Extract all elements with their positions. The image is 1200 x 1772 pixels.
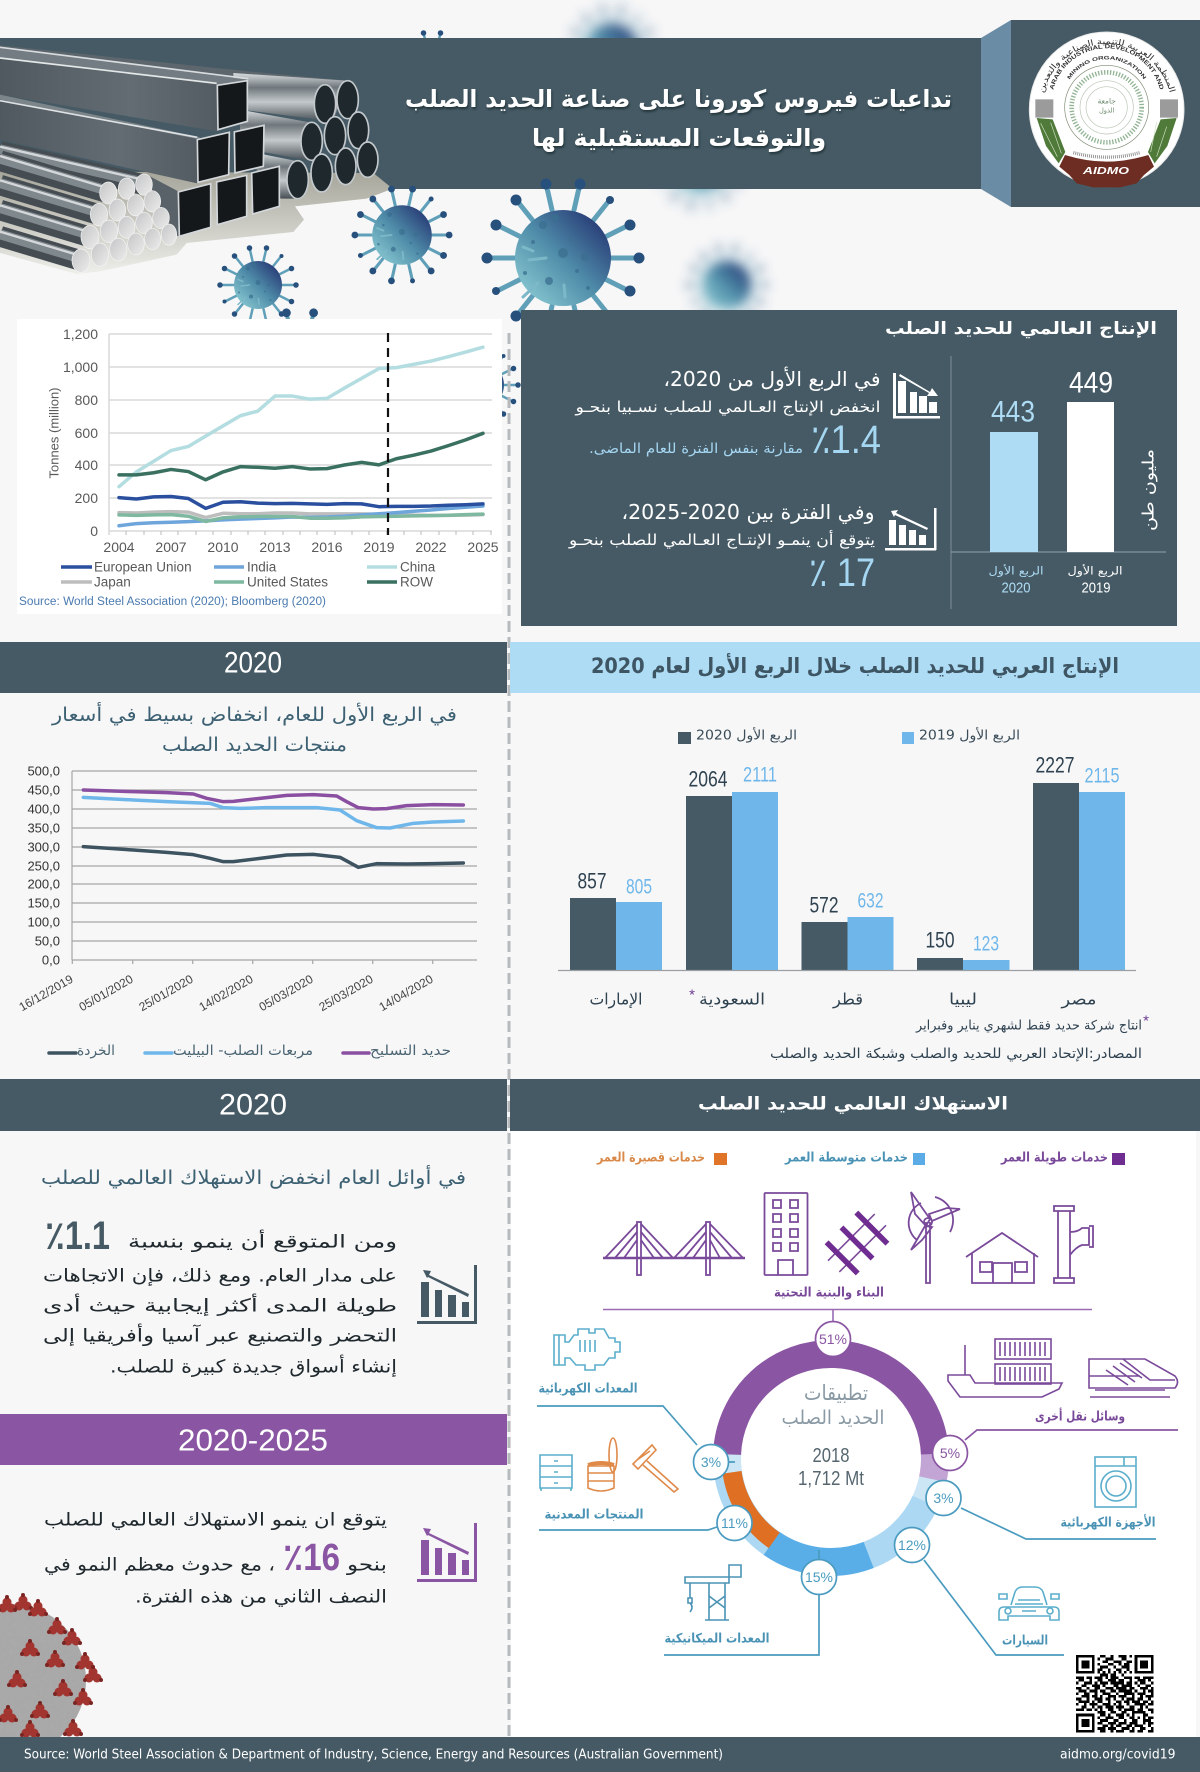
- panel: world production forecast chart: United States: [247, 574, 328, 590]
- bar chart: Q1 production: 449: [1069, 366, 1113, 400]
- panel: world production forecast chart: Tonnes (million): [46, 387, 62, 479]
- line chart: steel product prices: 350,0: [27, 820, 60, 836]
- bar chart: Arab production by country: السعودية: [699, 990, 765, 1010]
- panel: world production forecast chart: India: [247, 560, 277, 574]
- illustration: steel pipes: [0, 45, 393, 274]
- vertical dashed divider: [508, 333, 510, 1737]
- bar chart: Arab production by country: ليبيا: [949, 990, 977, 1008]
- legend: service life: [596, 1150, 1125, 1166]
- leader lines: [537, 1406, 1178, 1655]
- line chart: steel product prices: 200,0: [27, 876, 60, 892]
- round bars: [0, 147, 144, 261]
- text block: 2020 consumption: طويلة المدى أكثر إيجابية حيث أدى: [43, 1294, 397, 1316]
- icon: barrel: [588, 1438, 617, 1491]
- text block: 2020-2025 consumption: يتوقع ان ينمو الاستهلاك العالمي للصلب: [44, 1510, 387, 1530]
- panel: world production forecast chart: 0: [90, 523, 98, 539]
- line chart: steel product prices: 50,0: [35, 934, 60, 948]
- text block: 2020-2025 consumption: [44, 1510, 387, 1608]
- notes and sources: [770, 1012, 1149, 1062]
- bar chart: Q1 production: مليون طن: [1138, 449, 1158, 531]
- panel: world production forecast chart: 2022: [415, 539, 447, 555]
- category labels: المعدات الميكانيكية: [664, 1632, 770, 1646]
- heading: Q1 prices: منتجات الحديد الصلب: [162, 734, 347, 756]
- line chart: steel product prices: 25/01/2020: [136, 972, 196, 1014]
- line chart: steel product prices: 300,0: [27, 840, 60, 854]
- panel: world production forecast chart: 2010: [207, 539, 239, 555]
- label: construction: [603, 1286, 1092, 1322]
- panel: world production forecast chart: 2019: [363, 539, 395, 555]
- label: construction: البناء والبنية التحتية: [774, 1286, 884, 1300]
- QR code: [1076, 1655, 1153, 1732]
- icon: washing machine: [1095, 1457, 1136, 1507]
- chart legend: [678, 726, 1020, 744]
- bar chart: Q1 production: 443: [991, 396, 1035, 428]
- text block: Q1 2020 decline: [574, 367, 881, 462]
- title: [405, 85, 952, 152]
- bar chart: Arab production by country: قطر: [832, 990, 863, 1010]
- chart legend: الربع الأول 2020: [696, 726, 797, 744]
- panel: world production forecast chart: 600: [75, 425, 98, 441]
- footer: [0, 1737, 1200, 1772]
- line chart: steel product prices: 05/01/2020: [76, 972, 136, 1014]
- text block: Q1 2020 decline: في الربع الأول من 2020،: [664, 367, 880, 392]
- panel: world production forecast chart: Japan: [94, 574, 131, 590]
- heading: الإنتاج العالمي للحديد الصلب: [885, 319, 1157, 339]
- category labels: وسائل نقل أخرى: [1035, 1408, 1125, 1424]
- notes and sources: المصادر:الإتحاد العربي للحديد والصلب وشبكة الحديد والصلب: [770, 1046, 1142, 1062]
- panel: world production forecast chart: 2013: [259, 539, 291, 555]
- bar chart: Arab production by country: 2111: [743, 764, 777, 786]
- logo: AIDMO emblem: AIDMO: [1082, 166, 1129, 177]
- panel: steel applications: 11%: [721, 1515, 748, 1531]
- panel: steel applications: 15%: [805, 1569, 833, 1585]
- text block: 2020 consumption: على مدار العام. ومع ذلك، فإن الاتجاهات: [43, 1266, 397, 1286]
- panel: world production forecast chart: European Union: [94, 560, 192, 574]
- donut chart: [686, 1313, 976, 1603]
- text block: 2020-2025 consumption: ، مع حدوث معظم النمو في: [44, 1554, 275, 1576]
- decorative viruses behind header: [235, 6, 745, 436]
- bar chart: Q1 production: 2020: [1002, 580, 1030, 596]
- panel: world production forecast chart: 800: [75, 392, 98, 408]
- panel: steel applications: 51%: [819, 1331, 847, 1347]
- bar chart: Arab production by country: 123: [973, 932, 999, 956]
- icon: container ship: [948, 1339, 1062, 1397]
- panel: world production forecast chart: 200: [75, 490, 98, 506]
- line chart: steel product prices: 16/12/2019: [16, 972, 76, 1014]
- footer: aidmo.org/covid19: [1060, 1748, 1176, 1762]
- panel: world production forecast chart: Source: World Steel Association (2020); Bloomberg (2020): [19, 596, 326, 608]
- line chart: steel product prices: 25/03/2020: [316, 972, 376, 1014]
- heading: Q1 prices: [51, 702, 457, 756]
- bar chart: Arab production by country: *: [689, 986, 695, 1004]
- band: Arab production heading: الإنتاج العربي للحديد الصلب خلال الربع الأول لعام 2020: [591, 652, 1119, 679]
- panel: global steel production: [521, 310, 1177, 626]
- icon: rising bars white: [885, 508, 936, 550]
- notes and sources: *: [1143, 1012, 1149, 1030]
- line chart: steel product prices: 400,0: [27, 802, 60, 816]
- icon: falling bars white: [893, 373, 940, 418]
- line chart: steel product prices: 100,0: [27, 914, 60, 930]
- bar chart: Arab production by country: 572: [810, 892, 838, 918]
- panel: world production forecast chart: 2004: [103, 539, 135, 555]
- legend: service life: خدمات قصيرة العمر: [596, 1150, 705, 1166]
- logo: AIDMO emblem: MINING ORGANIZATION: [1067, 56, 1146, 80]
- band: 2020 consumption: 2020: [219, 1088, 287, 1122]
- text block: 2020 consumption: التحضر والتصنيع عبر آسيا وأفريقيا إلى: [43, 1324, 397, 1346]
- footer: Source: World Steel Association & Department of Industry, Science, Energy and Resources (Australian Government): [24, 1748, 723, 1762]
- panel: world production forecast chart: 400: [75, 457, 98, 473]
- icon: rising bars purple: [417, 1523, 477, 1582]
- category labels: المعدات الكهربائية: [538, 1382, 638, 1396]
- logo: AIDMO emblem: المنظمة العربية للتنمية الصناعية والتعدين: [1042, 38, 1176, 92]
- title: والتوقعات المستقبلية لها: [532, 124, 826, 152]
- band: global consumption heading: [510, 1079, 1200, 1131]
- bar chart: Q1 production: الربع الأول: [988, 564, 1044, 578]
- line chart: steel product prices: 450,0: [27, 782, 60, 798]
- panel: world production forecast chart: 2025: [467, 539, 499, 555]
- donut center label: الحديد الصلب: [782, 1407, 884, 1429]
- header band: [0, 20, 1200, 207]
- line chart: steel product prices: 500,0: [27, 764, 60, 778]
- chart legend: [49, 1043, 451, 1059]
- text block: 2020-2025 consumption: ٪16: [283, 1537, 340, 1579]
- icon: rising bars dark: [417, 1265, 477, 1324]
- round pipes back: [0, 45, 347, 121]
- panel: world production forecast chart: 1,000: [63, 359, 98, 375]
- band: 2020-2025: 2020-2025: [178, 1422, 328, 1458]
- legend: service life: خدمات متوسطة العمر: [784, 1150, 908, 1166]
- icon: car: [999, 1587, 1059, 1620]
- donut center label: تطبيقات: [804, 1381, 868, 1405]
- line chart: steel product prices: 14/02/2020: [196, 972, 256, 1014]
- panel: steel applications: [511, 1131, 1196, 1737]
- text block: 2020 consumption: ومن المتوقع أن ينمو بنسبة: [128, 1230, 397, 1252]
- bar chart: Arab production by country: 857: [578, 868, 606, 894]
- text block: Q1 2020 decline: ٪1.4: [811, 418, 881, 462]
- text block: 2020 consumption: [41, 1165, 466, 1378]
- band: Arab production heading: [510, 642, 1200, 693]
- notes and sources: انتاج شركة حديد فقط لشهري يناير وفبراير: [915, 1018, 1142, 1034]
- panel: steel applications: 3%: [933, 1490, 954, 1506]
- percentage callouts: [694, 1322, 968, 1594]
- title: تداعيات فيروس كورونا على صناعة الحديد الصلب: [405, 85, 952, 113]
- logo: AIDMO emblem: [1028, 32, 1184, 188]
- bar chart: Q1 production: 2019: [1082, 580, 1110, 596]
- category labels: الأجهزة الكهربائية: [1060, 1514, 1156, 1530]
- bar chart: Arab production by country: 2115: [1084, 764, 1120, 788]
- text block: 2020-2025 forecast: وفي الفترة بين 2020-2025،: [622, 500, 874, 525]
- legend: service life: خدمات طويلة العمر: [1000, 1150, 1108, 1166]
- icon: high speed train: [1089, 1359, 1178, 1397]
- bar chart: Arab production by country: 2064: [688, 766, 728, 792]
- band: global consumption heading: الاستهلاك العالمي للحديد الصلب: [698, 1094, 1008, 1114]
- chart legend: حديد التسليح: [370, 1043, 451, 1059]
- line chart: steel product prices: 05/03/2020: [256, 972, 316, 1014]
- panel: steel applications: 12%: [898, 1537, 926, 1553]
- icon: electric motor: [554, 1329, 620, 1370]
- panel: steel applications: 5%: [940, 1445, 960, 1461]
- chart legend: الخردة: [77, 1043, 115, 1059]
- text block: Q1 2020 decline: انخفض الإنتاج العـالمي للصلب نسـبيا بنحـو: [574, 398, 880, 417]
- band: 2020 prices: [0, 642, 507, 693]
- square tubes: [0, 48, 248, 85]
- text block: 2020-2025 forecast: يتوقع أن ينمـو الإنتـاج العـالمي للصلب بنحـو: [568, 530, 875, 550]
- line chart: steel product prices: 150,0: [27, 896, 60, 910]
- panel: world production forecast chart: China: [400, 560, 436, 574]
- line chart: steel product prices: 0,0: [42, 952, 60, 968]
- panel: steel applications: 3%: [701, 1454, 721, 1470]
- line chart: steel product prices: 14/04/2020: [376, 972, 436, 1014]
- bar chart: Arab production by country: 2227: [1036, 752, 1074, 778]
- icons: construction: [603, 1192, 1093, 1283]
- text block: 2020 consumption: إنشاء أسواق جديدة كبيرة للصلب.: [110, 1354, 397, 1378]
- icon: drawers: [540, 1455, 572, 1491]
- icon: hammer: [633, 1445, 678, 1492]
- text block: 2020-2025 forecast: ٪ 17: [809, 551, 875, 595]
- donut center label: 2018: [812, 1445, 850, 1467]
- panel: world production forecast chart: 1,200: [63, 326, 98, 342]
- bar chart: Arab production by country: الإمارات: [590, 990, 642, 1010]
- heading: Q1 prices: في الربع الأول للعام، انخفاض بسيط في أسعار: [51, 702, 457, 726]
- icon: crane: [685, 1565, 741, 1620]
- band: 2020 consumption: [0, 1079, 507, 1131]
- panel: world production forecast chart: 2007: [155, 539, 187, 555]
- shadow under steel: [0, 171, 393, 274]
- text block: 2020 consumption: ٪1.1: [45, 1214, 110, 1258]
- line chart: steel product prices: 250,0: [27, 858, 60, 874]
- bar chart: Arab production by country: 632: [858, 890, 884, 912]
- donut center label: 1,712 Mt: [798, 1468, 864, 1490]
- chart legend: مربعات الصلب- البيليت: [173, 1043, 313, 1059]
- logo: AIDMO emblem: جامعة: [1098, 96, 1116, 105]
- category labels: [538, 1382, 1156, 1648]
- bar chart: Q1 production: [988, 366, 1158, 596]
- text block: 2020-2025 consumption: النصف الثاني من هذه الفترة.: [135, 1586, 387, 1608]
- band: 2020 prices: 2020: [224, 646, 282, 680]
- text block: 2020-2025 consumption: بنحو: [346, 1554, 387, 1576]
- illustration: coronavirus: [0, 1593, 103, 1756]
- category labels: المنتجات المعدنية: [544, 1508, 644, 1522]
- bar chart: Arab production by country: 150: [926, 928, 954, 952]
- band: 2020-2025: [0, 1414, 507, 1465]
- bar chart: Arab production by country: [558, 726, 1136, 1010]
- text block: Q1 2020 decline: مقارنة بنفس الفترة للعام الماضى.: [589, 441, 803, 457]
- panel: world production forecast chart: 2016: [311, 539, 343, 555]
- text block: 2020 consumption: في أوائل العام انخفض الاستهلاك العالمي للصلب: [41, 1165, 466, 1189]
- bar chart: Arab production by country: مصر: [1060, 990, 1096, 1010]
- line chart: steel product prices: [16, 764, 477, 1059]
- foreground viruses: [217, 178, 768, 338]
- chart legend: الربع الأول 2019: [919, 726, 1020, 744]
- panel: world production forecast chart: ROW: [400, 574, 433, 590]
- text block: 2020-2025 forecast: [568, 500, 875, 595]
- category labels: السيارات: [1002, 1634, 1048, 1648]
- panel: world production forecast chart: [17, 319, 502, 614]
- logo: AIDMO emblem: ARAB INDUSTRIAL DEVELOPMENT AND: [1050, 44, 1164, 90]
- bar chart: Q1 production: الربع الأول: [1068, 564, 1122, 578]
- donut center label: [782, 1381, 884, 1490]
- bar chart: Arab production by country: 805: [626, 876, 652, 898]
- logo: AIDMO emblem: الدول: [1099, 107, 1115, 115]
